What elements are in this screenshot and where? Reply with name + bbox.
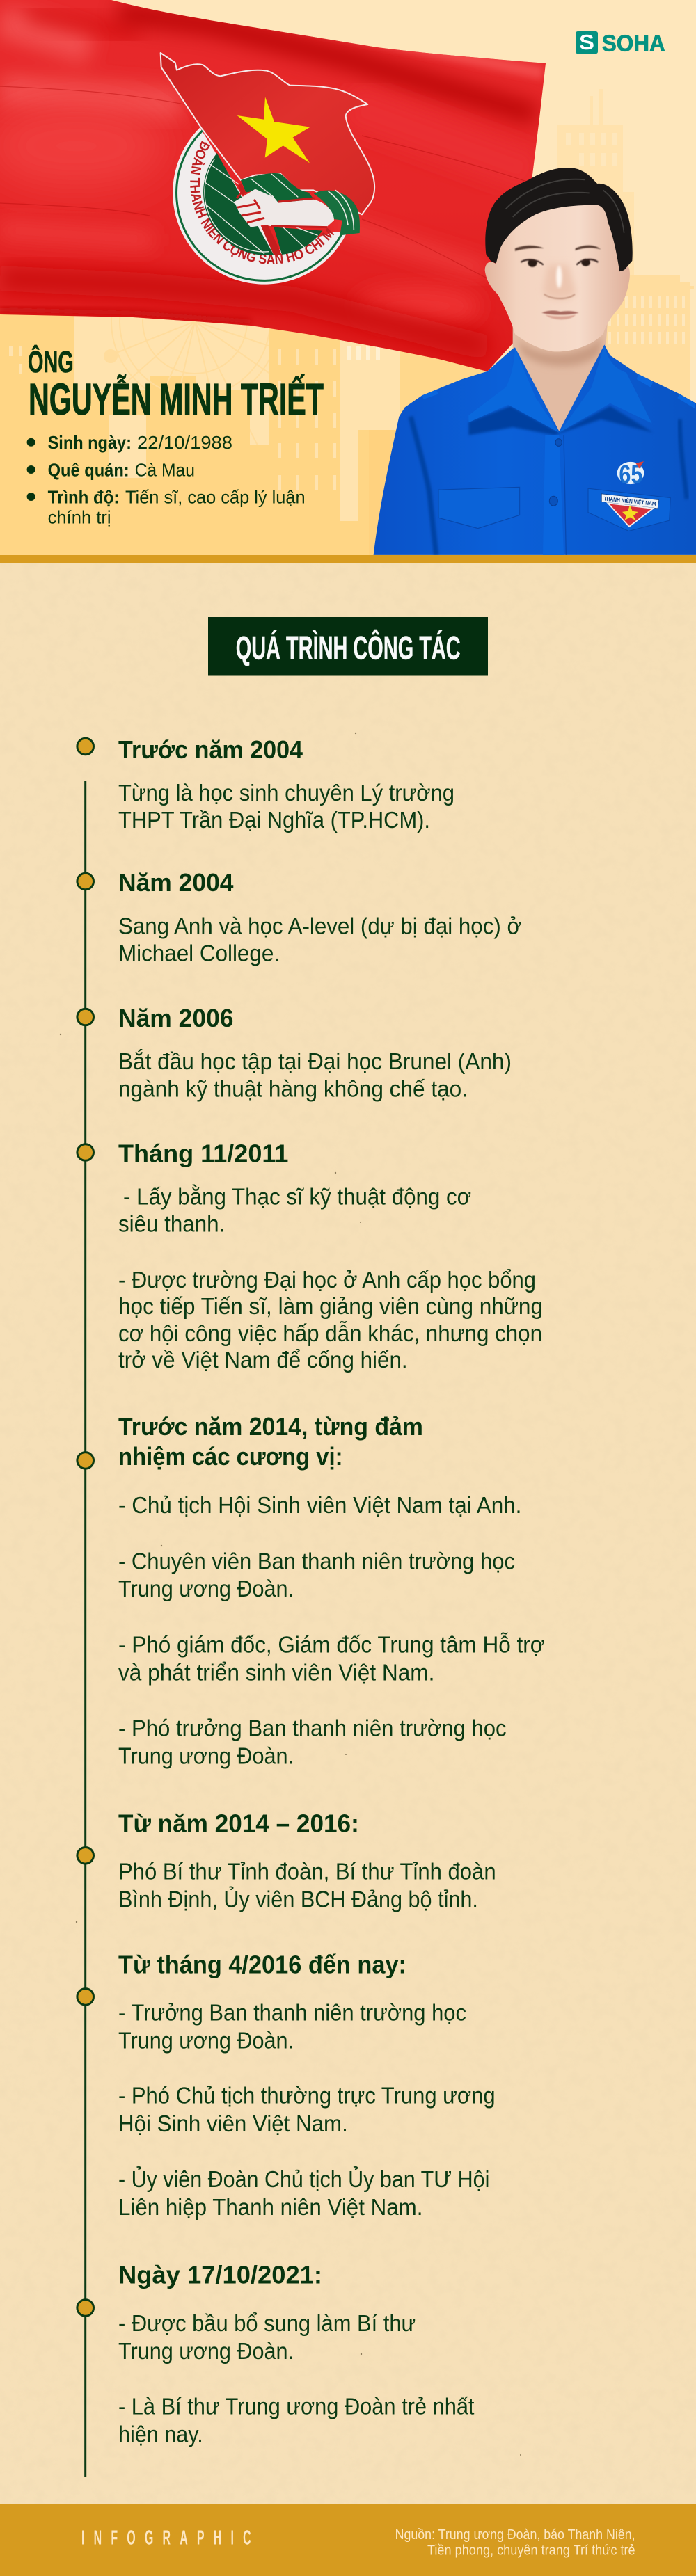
logo: Đoàn Thanh niên emblem — [160, 52, 376, 285]
emblem hand — [235, 189, 334, 227]
entry: Năm 2004: Michael College. — [118, 941, 280, 966]
personal details list: Quê quán: — [48, 459, 129, 480]
face features — [515, 246, 601, 319]
neck — [513, 318, 608, 435]
entry: Ngày 17/10/2021: Trung ương Đoàn. — [118, 2338, 294, 2364]
youth badge: THANH NIÊN VIỆT NAM — [603, 495, 656, 507]
footer source: Nguồn: Trung ương Đoàn, báo Thanh Niên, — [395, 2527, 635, 2543]
entry: Năm 2006 — [118, 1004, 512, 1102]
entry: Ngày 17/10/2021: hiện nay. — [118, 2421, 203, 2447]
entry: Trước năm 2004 — [118, 735, 454, 833]
personal details list: Cà Mau — [135, 459, 195, 480]
name heading — [28, 344, 324, 424]
entry: Từ tháng 4/2016 đến nay — [118, 1951, 496, 2220]
entry: Năm 2004: Năm 2004 — [118, 868, 234, 897]
shirt — [374, 345, 696, 555]
footer label: INFOGRAPHIC — [81, 2526, 260, 2548]
logo: SOHA — [576, 30, 665, 56]
entry: Từ tháng 4/2016 đến nay: - Phó Chủ tịch thường trực Trung ương — [118, 2083, 496, 2109]
pockets — [438, 487, 520, 529]
entry: Từ năm 2014 – 2016: Phó Bí thư Tỉnh đoàn, Bí thư Tỉnh đoàn — [118, 1859, 496, 1885]
entry: Ngày 17/10/2021 — [118, 2260, 475, 2447]
entry: Ngày 17/10/2021: Ngày 17/10/2021: — [118, 2260, 322, 2289]
gold divider bar — [0, 555, 696, 563]
face — [485, 191, 630, 351]
personal details list — [27, 432, 306, 528]
entry: Tháng 11/2011: - Được trường Đại học ở Anh cấp học bổng — [118, 1267, 536, 1293]
logo: SOHA: S — [579, 30, 594, 54]
youth badge — [601, 494, 659, 527]
paper background — [0, 563, 696, 2504]
entry: Trước năm 2004: THPT Trần Đại Nghĩa (TP.HCM). — [118, 807, 430, 833]
name heading: NGUYỄN MINH TRIẾT — [29, 374, 324, 424]
hair — [485, 168, 633, 271]
entry: Trước năm 2004: Từng là học sinh chuyên Lý trường — [118, 780, 454, 806]
entry: Trước năm 2014: - Chủ tịch Hội Sinh viên Việt Nam tại Anh. — [118, 1492, 521, 1518]
entry: Tháng 11/2011: - Lấy bằng Thạc sĩ kỹ thuật động cơ — [123, 1184, 471, 1209]
entry: Trước năm 2014: - Phó giám đốc, Giám đốc Trung tâm Hỗ trợ — [118, 1631, 544, 1657]
entry: Trước năm 2014: Trung ương Đoàn. — [118, 1576, 294, 1601]
footer band — [0, 2504, 696, 2576]
section title: QUÁ TRÌNH CÔNG TÁC — [236, 630, 461, 666]
entry: Tháng 11/2011: Tháng 11/2011 — [118, 1139, 288, 1167]
personal details list: 22/10/1988 — [137, 432, 232, 453]
footer source: Tiền phong, chuyên trang Trí thức trẻ — [427, 2543, 635, 2559]
entry: Từ năm 2014 – 2016: Từ năm 2014 – 2016: — [118, 1809, 359, 1837]
entry: Từ tháng 4/2016 đến nay: Liên hiệp Thanh niên Việt Nam. — [118, 2194, 422, 2220]
entry: Ngày 17/10/2021: - Là Bí thư Trung ương Đoàn trẻ nhất — [118, 2393, 475, 2419]
entry: Năm 2006: Bắt đầu học tập tại Đại học Brunel (Anh) — [118, 1048, 512, 1074]
footer source — [395, 2527, 635, 2559]
entry: Trước năm 2014: Trung ương Đoàn. — [118, 1743, 294, 1769]
entry: Từ tháng 4/2016 đến nay: - Trưởng Ban thanh niên trường học — [118, 1999, 466, 2025]
logo: SOHA: SOHA — [602, 30, 665, 56]
entry: Tháng 11/2011 — [118, 1139, 543, 1373]
entry: Năm 2006: ngành kỹ thuật hàng không chế tạo. — [118, 1076, 468, 1102]
collar — [468, 349, 559, 433]
timeline dots — [77, 738, 93, 2316]
emblem ring text: ĐOÀN THANH NIÊN CỘNG SẢN HỒ CHÍ MINH — [190, 141, 334, 264]
name heading: ÔNG — [28, 344, 74, 379]
portrait — [374, 168, 696, 555]
personal details list: chính trị — [48, 507, 111, 528]
entry: Năm 2006: Năm 2006 — [118, 1004, 234, 1032]
entry: Trước năm 2014: nhiệm các cương vị: — [118, 1442, 342, 1471]
personal details list: Trình độ: — [48, 486, 119, 507]
timeline line — [84, 781, 86, 2477]
entry: Từ tháng 4/2016 đến nay: Từ tháng 4/2016 đến nay: — [118, 1951, 406, 1978]
entry: Ngày 17/10/2021: - Được bầu bổ sung làm Bí thư — [118, 2310, 416, 2336]
skyline background — [0, 89, 694, 555]
flag — [0, 0, 557, 376]
entry: Tháng 11/2011: siêu thanh. — [118, 1210, 225, 1236]
entry: Trước năm 2014 — [118, 1412, 544, 1769]
section title — [208, 617, 488, 676]
entry: Năm 2004: Sang Anh và học A-level (dự bị đại học) ở — [118, 913, 521, 938]
personal details list: Sinh ngày: — [48, 432, 132, 453]
emblem star — [237, 97, 310, 163]
entry: Từ tháng 4/2016 đến nay: Trung ương Đoàn. — [118, 2028, 294, 2054]
entry: Từ tháng 4/2016 đến nay: Hội Sinh viên Việt Nam. — [118, 2111, 348, 2136]
entry: Tháng 11/2011: học tiếp Tiến sĩ, làm giảng viên cùng những — [118, 1293, 543, 1319]
entry: Trước năm 2014: và phát triển sinh viên Việt Nam. — [118, 1660, 434, 1685]
entry: Từ năm 2014 – 2016 — [118, 1809, 496, 1912]
entry: Trước năm 2014: - Chuyên viên Ban thanh niên trường học — [118, 1549, 515, 1574]
entry: Từ năm 2014 – 2016: Bình Định, Ủy viên BCH Đảng bộ tỉnh. — [118, 1886, 478, 1912]
entry: Trước năm 2014: Trước năm 2014, từng đảm — [118, 1412, 423, 1441]
entry: Tháng 11/2011: cơ hội công việc hấp dẫn khác, nhưng chọn — [118, 1320, 542, 1346]
badge 65: 65 — [619, 460, 642, 489]
personal details list: Tiến sĩ, cao cấp lý luận — [125, 486, 306, 507]
entry: Năm 2004 — [118, 868, 521, 966]
entry: Tháng 11/2011: trở về Việt Nam để cống hiến. — [118, 1347, 408, 1373]
shirt shading — [411, 374, 695, 555]
entry: Từ tháng 4/2016 đến nay: - Ủy viên Đoàn Chủ tịch Ủy ban TƯ Hội — [118, 2166, 489, 2192]
header hero panel — [0, 0, 696, 555]
entry: Trước năm 2004: Trước năm 2004 — [118, 735, 303, 764]
entry: Trước năm 2014: - Phó trưởng Ban thanh niên trường học — [118, 1715, 507, 1741]
buttons — [549, 439, 562, 506]
timeline — [77, 735, 544, 2477]
